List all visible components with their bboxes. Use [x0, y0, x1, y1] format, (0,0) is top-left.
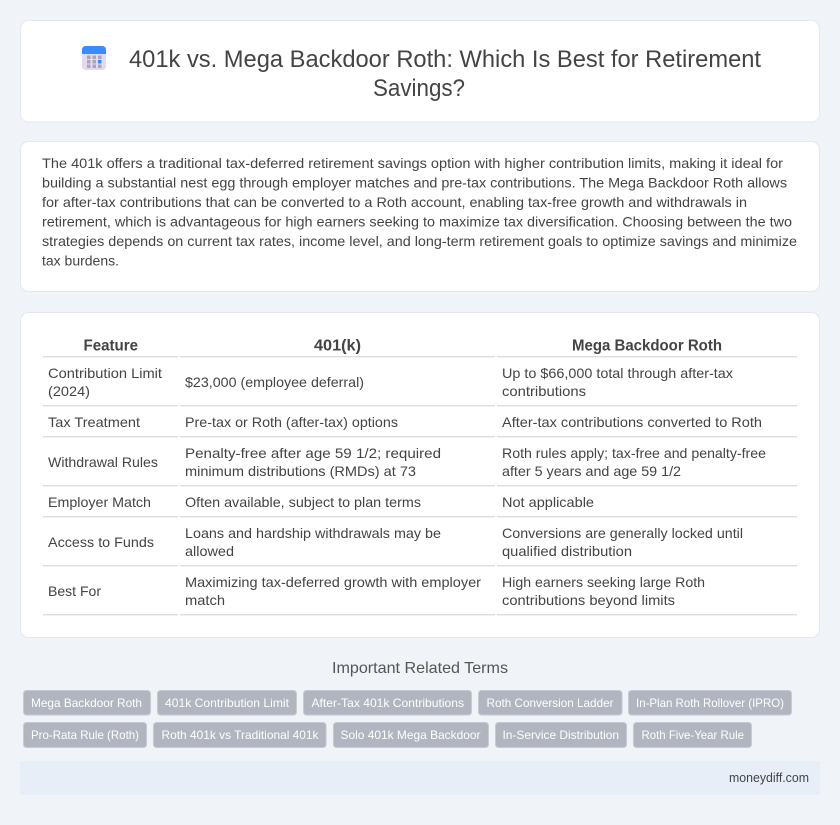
row: contribution limit: $23,000 (employee deferral) — [185, 374, 364, 390]
table row lines — [43, 356, 797, 615]
text block: summary — [42, 155, 797, 268]
icon: calendar — [82, 46, 106, 70]
tag: In-Service Distribution: In-Service Distribution — [502, 728, 619, 742]
tag: Solo 401k Mega Backdoor — [334, 722, 488, 748]
row: withdrawal rules — [48, 445, 766, 479]
row: best for: match — [185, 592, 225, 608]
text block: summary: retirement, which is advantageous for high earners seeking to maximize tax diversification. Choosing between the two — [42, 214, 792, 230]
tag: Roth 401k vs Traditional 401k — [154, 722, 326, 748]
row: best for: High earners seeking large Roth — [502, 574, 705, 590]
row: contribution limit — [48, 365, 733, 399]
panel: comparison table — [20, 312, 820, 638]
tag: In-Plan Roth Rollover (IPRO): In-Plan Roth Rollover (IPRO) — [636, 696, 784, 710]
text block: summary: The 401k offers a traditional tax-deferred retirement savings option with higher contribution limits, making it ideal for — [42, 155, 783, 171]
row: employer match: Not applicable — [502, 494, 594, 510]
title — [129, 46, 761, 102]
row: contribution limit: (2024) — [48, 383, 90, 399]
row: employer match — [48, 494, 594, 510]
row: withdrawal rules: Withdrawal Rules — [48, 454, 158, 470]
row: tax treatment: After-tax contributions converted to Roth — [502, 414, 762, 430]
table header: 401(k) — [314, 338, 361, 354]
row: employer match: Often available, subject to plan terms — [185, 494, 421, 510]
tag: After-Tax 401k Contributions — [304, 690, 472, 715]
table header — [84, 338, 722, 354]
row: contribution limit: Contribution Limit — [48, 365, 162, 381]
title panel — [20, 20, 820, 122]
tag: Roth 401k vs Traditional 401k: Roth 401k vs Traditional 401k — [162, 728, 319, 742]
row: tax treatment: Tax Treatment — [48, 414, 140, 430]
row: tax treatment — [48, 414, 762, 430]
row: access to funds: Conversions are generally locked until — [502, 525, 743, 541]
row: access to funds: allowed — [185, 543, 234, 559]
title: 401k vs. Mega Backdoor Roth: Which Is Best for Retirement — [129, 46, 761, 73]
text block: summary: building a substantial nest egg through employer matches and pre-tax contributions. The Mega Backdoor Roth allows — [42, 174, 787, 190]
tag: In-Service Distribution — [496, 722, 626, 748]
row: tax treatment: Pre-tax or Roth (after-tax) options — [185, 414, 398, 430]
tag: After-Tax 401k Contributions: After-Tax 401k Contributions — [312, 696, 464, 710]
row: withdrawal rules: Roth rules apply; tax-free and penalty-free — [502, 445, 766, 461]
tag: Solo 401k Mega Backdoor: Solo 401k Mega Backdoor — [340, 728, 480, 742]
tag: Roth Conversion Ladder: Roth Conversion Ladder — [486, 696, 614, 710]
row: access to funds — [48, 525, 743, 559]
text block: summary: tax burdens. — [42, 252, 119, 268]
tag: Mega Backdoor Roth: Mega Backdoor Roth — [31, 696, 142, 710]
tag: Mega Backdoor Roth — [24, 690, 150, 715]
panel: summary paragraph — [20, 142, 820, 292]
row: best for: contributions beyond limits — [502, 592, 675, 608]
row: best for — [48, 574, 705, 608]
text block: summary: for after-tax contributions that can be converted to a Roth account, enabling tax-free growth and withdrawals in — [42, 194, 747, 210]
row: access to funds: qualified distribution — [502, 543, 632, 559]
row: employer match: Employer Match — [48, 494, 151, 510]
heading: important related terms: Important Related Terms — [332, 660, 508, 677]
row: withdrawal rules: after 5 years and age 59 1/2 — [502, 463, 681, 479]
row: best for: Maximizing tax-deferred growth with employer — [185, 574, 481, 590]
table header: Feature — [84, 338, 138, 354]
row: withdrawal rules: minimum distributions (RMDs) at 73 — [185, 463, 416, 479]
row: access to funds: Access to Funds — [48, 534, 154, 550]
tag: 401k Contribution Limit: 401k Contribution Limit — [165, 696, 290, 710]
table header: Mega Backdoor Roth — [572, 338, 722, 354]
tag: Pro-Rata Rule (Roth) — [24, 722, 146, 748]
row: contribution limit: contributions — [502, 383, 586, 399]
row: best for: Best For — [48, 583, 101, 599]
footer: moneydiff.com — [729, 771, 809, 785]
footer — [20, 761, 820, 795]
tag: Roth Five-Year Rule — [634, 722, 752, 748]
tag: Roth Conversion Ladder — [478, 690, 622, 715]
tag: 401k Contribution Limit — [158, 690, 296, 715]
tag: Roth Five-Year Rule: Roth Five-Year Rule — [642, 728, 744, 742]
row: contribution limit: Up to $66,000 total through after-tax — [502, 365, 733, 381]
tag: Pro-Rata Rule (Roth): Pro-Rata Rule (Roth) — [31, 728, 139, 742]
tag: In-Plan Roth Rollover (IPRO) — [628, 690, 792, 715]
row: withdrawal rules: Penalty-free after age 59 1/2; required — [185, 445, 441, 461]
text block: summary: strategies depends on current tax rates, income level, and long-term retirement goals to optimize savings and minimize — [42, 233, 797, 249]
related term tags — [24, 690, 792, 748]
title: Savings? — [373, 75, 465, 102]
row: access to funds: Loans and hardship withdrawals may be — [185, 525, 441, 541]
